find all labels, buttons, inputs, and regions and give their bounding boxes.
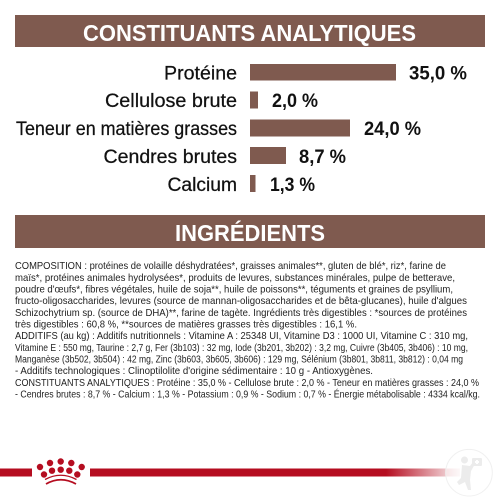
- heading banner: constituants analytiques: [15, 15, 485, 47]
- row: calcium: [168, 175, 315, 196]
- icon: royal canin crown logo: [37, 458, 85, 484]
- row: calcium: Calcium: [168, 175, 237, 196]
- row: cellulose brute: Cellulose brute: [105, 91, 237, 112]
- row: cellulose brute: [105, 91, 318, 112]
- row: teneur en matières grasses: Teneur en matières grasses: [16, 119, 237, 140]
- bar chart: analytical constituents: [16, 64, 467, 196]
- row: teneur en matières grasses: [16, 119, 421, 140]
- heading banner: ingrédients: [15, 215, 485, 248]
- row: cellulose brute: 2,0 %: [272, 91, 318, 112]
- text block: composition, additifs, constituants: - Additifs technologiques : Clinoptilolite d'origine sédimentaire : 10 g - Antioxygènes.: [15, 365, 373, 377]
- icon: person carrying medical case in circle: [446, 449, 492, 496]
- row: protéine: 35,0 %: [409, 64, 467, 84]
- footer red line: [0, 468, 460, 476]
- text block: composition, additifs, constituants: Schizochytrium sp. (source de DHA)**, farine de tagète. Ingrédients très digestibles : *sources de protéines: [15, 307, 467, 319]
- text block: composition, additifs, constituants: [15, 260, 480, 400]
- row: protéine: [164, 64, 467, 84]
- text block: composition, additifs, constituants: très digestibles : 60,8 %, **sources de matières grasses très digestibles : 16,1 %.: [15, 318, 357, 330]
- row: calcium: 1,3 %: [270, 175, 315, 196]
- text block: composition, additifs, constituants: maïs*, protéines animales hydrolysées*, produits de levures, substances minérales, pulpe de betterave,: [15, 272, 455, 284]
- heading banner: constituants analytiques: CONSTITUANTS ANALYTIQUES: [83, 20, 416, 46]
- row: cendres brutes: 8,7 %: [299, 147, 346, 168]
- text block: composition, additifs, constituants: poudre d'œufs*, fibres végétales, huile de soja**, huile de poissons**, téguments et graines de psyllium,: [15, 284, 453, 296]
- text block: composition, additifs, constituants: fructo-oligosaccharides, levures (source de mannan-oligosaccharides et de bêta-glucanes), huile d'algues: [15, 295, 467, 307]
- row: cendres brutes: [104, 147, 346, 168]
- heading banner: ingrédients: INGRÉDIENTS: [175, 219, 325, 246]
- text block: composition, additifs, constituants: COMPOSITION : protéines de volaille déshydratées*, graisses animales**, gluten de blé*, riz*, farine de: [15, 260, 446, 272]
- row: teneur en matières grasses: 24,0 %: [364, 119, 421, 140]
- row: cendres brutes: Cendres brutes: [104, 147, 237, 168]
- row: protéine: Protéine: [164, 64, 237, 84]
